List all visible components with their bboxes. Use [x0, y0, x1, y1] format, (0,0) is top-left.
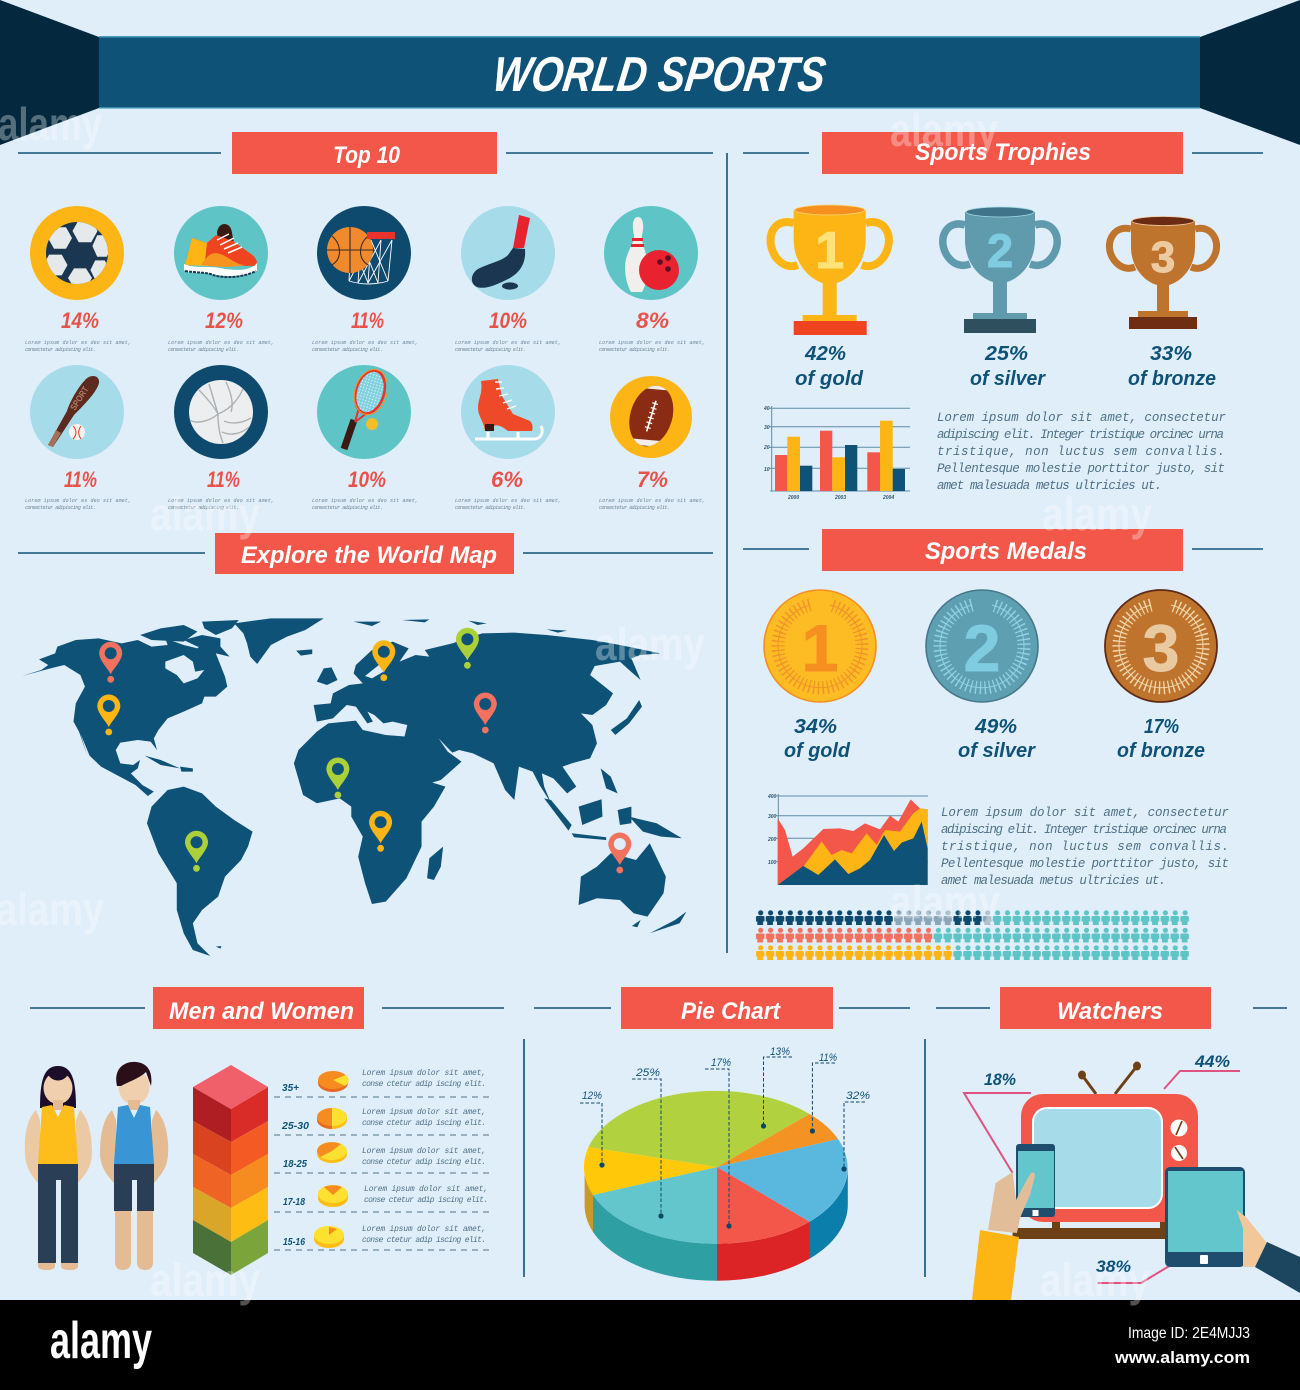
watermarks: alamy — [150, 488, 260, 540]
row text: Lorem ipsum dolor sit amet, — [362, 1147, 486, 1156]
medal label: of gold: of gold — [784, 740, 851, 762]
trophy label: bronze: 33% — [1150, 343, 1192, 365]
footer url: www.alamy.com — [1114, 1348, 1250, 1367]
area chart — [767, 794, 928, 885]
icon: tennis racket and ball — [317, 365, 411, 459]
captions: bottom row: Lorem ipsum dolor es deo sit amet, — [25, 498, 131, 504]
callout: 44% — [1164, 1052, 1240, 1089]
captions: bottom row: Lorem ipsum dolor es deo sit amet, — [168, 498, 274, 504]
mini pie: 15-16 — [314, 1226, 344, 1248]
callout: 11% — [810, 1052, 837, 1134]
bar chart: 20 — [763, 445, 770, 451]
watermarks: alamy — [0, 98, 102, 150]
footer image id: Image ID: 2E4MJJ3 — [1128, 1325, 1250, 1342]
row text: Lorem ipsum dolor sit amet, — [364, 1185, 488, 1194]
map pin: Australia — [608, 832, 631, 873]
heading: Pie Chart — [621, 987, 833, 1029]
callout: 32%: 32% — [846, 1090, 870, 1102]
map pin: Scandinavia — [372, 640, 395, 681]
captions: top row: Lorem ipsum dolor es deo sit amet, — [25, 340, 131, 346]
age labels: 17-18 — [283, 1197, 305, 1208]
heading: Top 10: Top 10 — [333, 142, 401, 169]
area chart: 300 — [768, 814, 777, 820]
icon: ice skate — [461, 365, 555, 459]
bar chart: 30 — [764, 425, 770, 431]
pie slices — [584, 1091, 848, 1244]
row text: Lorem ipsum dolor sit amet, — [362, 1225, 486, 1234]
icon: baseball bat and ball: SPORT — [68, 384, 91, 412]
people row 2 — [756, 928, 1190, 944]
heading: Sports Medals — [822, 529, 1183, 571]
map pin: Canada — [99, 642, 122, 683]
map pin: South America — [185, 831, 208, 872]
percentages: bottom row: 7% — [637, 467, 668, 492]
callout: 12%: 12% — [582, 1090, 602, 1102]
icon: baseball bat and ball — [30, 365, 124, 459]
trophy label: of silver: of silver — [970, 368, 1046, 390]
captions: top row: Lorem ipsum dolor es deo sit amet, — [168, 340, 274, 346]
captions: top row: Lorem ipsum dolor es deo sit amet, — [312, 340, 418, 346]
icon: basketball and hoop — [317, 206, 411, 300]
callout: 38%: 38% — [1096, 1257, 1131, 1276]
panel: world map — [22, 618, 687, 956]
title: WORLD SPORTS — [489, 47, 829, 102]
icon: gold medal: 1 — [802, 611, 838, 685]
percentages: top row: 14% — [61, 308, 99, 333]
captions: top row: Lorem ipsum dolor es deo sit amet, — [599, 340, 705, 346]
trophy label: gold: 42% — [804, 343, 846, 365]
heading: Sports Trophies — [822, 132, 1183, 174]
text block: trophies: adipiscing elit. Integer tristique orcinec urna — [937, 428, 1224, 442]
watermarks: alamy — [890, 104, 998, 156]
captions: bottom row — [25, 498, 705, 511]
icon: hockey stick and puck — [461, 206, 555, 300]
age rows — [274, 1069, 493, 1250]
percentages: bottom row: 10% — [348, 467, 386, 492]
callout: 25% — [632, 1067, 664, 1219]
icon: silver trophy: 2 — [987, 224, 1013, 277]
text block: medals: adipiscing elit. Integer tristique orcinec urna — [941, 823, 1227, 837]
row text: conse ctetur adip iscing elit. — [362, 1119, 486, 1128]
area chart: 100 — [768, 860, 777, 866]
callout: 44%: 44% — [1194, 1052, 1230, 1071]
panel: men and women — [25, 1062, 493, 1275]
pie sides — [585, 1167, 848, 1281]
bar chart: 2004 — [882, 495, 894, 501]
footer logo: alamy — [50, 1312, 152, 1370]
text block: medals: Pellentesque molestie porttitor justo, sit — [941, 857, 1229, 871]
icon: gold trophy — [771, 205, 889, 335]
row text — [362, 1069, 488, 1245]
watermarks: alamy — [595, 618, 705, 670]
callout: 12% — [580, 1090, 605, 1168]
percentages: top row: 10% — [489, 308, 527, 333]
heading: Sports Trophies: Sports Trophies — [915, 139, 1091, 166]
row text: conse ctetur adip iscing elit. — [364, 1196, 488, 1205]
percentages: bottom row: 11% — [207, 467, 240, 492]
bar chart — [763, 406, 910, 501]
row text: conse ctetur adip iscing elit. — [362, 1236, 486, 1245]
heading: Pie Chart: Pie Chart — [681, 998, 781, 1025]
area chart: 200 — [767, 837, 777, 843]
heading: Watchers: Watchers — [1057, 998, 1163, 1025]
captions: bottom row: consectetur adipiscing elit. — [312, 505, 383, 511]
icon: american football — [610, 370, 692, 458]
map pin: USA — [97, 694, 120, 735]
watermarks: alamy — [1040, 1254, 1150, 1306]
panel: sports trophies — [763, 205, 1226, 501]
watermarks: alamy — [1042, 488, 1152, 540]
callout: 11%: 11% — [819, 1052, 837, 1064]
trophy label: of bronze: of bronze — [1128, 368, 1216, 390]
icon: smartphone in hand — [972, 1144, 1055, 1300]
medal label: of bronze: of bronze — [1117, 740, 1205, 762]
captions: bottom row: Lorem ipsum dolor es deo sit amet, — [455, 498, 561, 504]
text block: medals: tristique, non luctus sem convallis. — [941, 840, 1229, 854]
icon: bowling pin and ball — [604, 206, 698, 300]
callout: 13%: 13% — [770, 1046, 790, 1058]
captions: bottom row: consectetur adipiscing elit. — [168, 505, 239, 511]
captions: top row: consectetur adipiscing elit. — [455, 347, 526, 353]
panel: top 10 sports — [25, 206, 705, 511]
heading: Men and Women — [153, 987, 364, 1029]
captions: bottom row: consectetur adipiscing elit. — [599, 505, 670, 511]
icon: tablet in hand — [1165, 1167, 1300, 1293]
map pin: Central Africa — [369, 811, 392, 852]
icon: silver medal: 2 — [964, 611, 1000, 685]
percentages: bottom row: 11% — [64, 467, 97, 492]
bar chart: 10 — [764, 467, 770, 473]
panel: sports medals — [756, 590, 1229, 961]
panel: watchers — [964, 1052, 1300, 1300]
captions: top row: consectetur adipiscing elit. — [599, 347, 670, 353]
medal label: 34%: 34% — [794, 716, 837, 738]
map pin: West Africa — [326, 758, 349, 798]
captions: top row: consectetur adipiscing elit. — [312, 347, 383, 353]
people row 3 — [756, 945, 1190, 961]
icon: man — [100, 1062, 168, 1270]
medal label: 49%: 49% — [974, 716, 1017, 738]
row text: conse ctetur adip iscing elit. — [362, 1080, 486, 1089]
age labels: 15-16 — [283, 1237, 305, 1248]
heading: Sports Medals: Sports Medals — [925, 538, 1087, 565]
area chart: 400 — [767, 794, 777, 800]
percentages: bottom row — [64, 467, 668, 492]
icon: silver trophy — [943, 207, 1057, 333]
captions: bottom row: Lorem ipsum dolor es deo sit amet, — [312, 498, 418, 504]
icon: gold trophy: 1 — [815, 222, 844, 280]
icon: volleyball — [174, 365, 268, 459]
bar chart: 2003 — [834, 495, 846, 501]
heading: Men and Women: Men and Women — [169, 998, 354, 1025]
icon: bronze trophy: 3 — [1151, 233, 1175, 282]
row text: Lorem ipsum dolor sit amet, — [362, 1108, 486, 1117]
trophy label: of gold: of gold — [795, 368, 864, 390]
callout: 32% — [841, 1090, 870, 1172]
mini pie: 35+ — [318, 1071, 349, 1092]
footer bar — [0, 1300, 1300, 1390]
isometric bar stack — [193, 1065, 268, 1275]
callout: 38% — [1096, 1257, 1173, 1283]
callout: 25%: 25% — [635, 1067, 660, 1079]
mini pie: 17-18 — [318, 1185, 348, 1207]
captions: bottom row: consectetur adipiscing elit. — [25, 505, 96, 511]
icon: television — [1013, 1062, 1198, 1239]
text block: trophies: tristique, non luctus sem convallis. — [937, 445, 1225, 459]
world map continents — [22, 618, 687, 956]
icon: woman — [25, 1066, 92, 1270]
icon: gold medal — [764, 590, 876, 702]
map pin: Russia — [456, 628, 479, 669]
age labels: 25-30 — [281, 1121, 309, 1132]
icon: bronze medal — [1105, 590, 1217, 702]
title banner — [0, 0, 1300, 145]
heading: Top 10 — [232, 132, 497, 174]
text block: trophies: amet malesuada metus ultricies ut. — [937, 479, 1162, 493]
percentages: top row — [61, 308, 669, 333]
heading: Explore the World Map — [215, 533, 514, 574]
panel: pie chart — [580, 1046, 870, 1281]
icon: soccer ball — [30, 206, 124, 300]
row text: Lorem ipsum dolor sit amet, — [362, 1069, 486, 1078]
callout: 18% — [964, 1070, 1031, 1173]
captions: top row: Lorem ipsum dolor es deo sit amet, — [455, 340, 561, 346]
heading: Explore the World Map: Explore the World Map — [241, 542, 497, 569]
map pin: Central Asia — [474, 692, 497, 733]
captions: bottom row: Lorem ipsum dolor es deo sit amet, — [599, 498, 705, 504]
icon: silver medal — [926, 590, 1038, 702]
captions: top row: consectetur adipiscing elit. — [25, 347, 96, 353]
trophy label: silver: 25% — [984, 343, 1028, 365]
watermarks: alamy — [890, 876, 1000, 928]
percentages: bottom row: 6% — [491, 467, 523, 492]
captions: top row: consectetur adipiscing elit. — [168, 347, 239, 353]
text block: medals: amet malesuada metus ultricies ut. — [941, 874, 1166, 888]
text block: trophies: Pellentesque molestie porttitor justo, sit — [937, 462, 1225, 476]
percentages: top row: 11% — [351, 308, 384, 333]
heading: Watchers — [1000, 987, 1211, 1029]
row text: conse ctetur adip iscing elit. — [362, 1158, 486, 1167]
watermarks: alamy — [150, 1254, 260, 1306]
age labels: 35+ — [282, 1083, 299, 1094]
age labels — [281, 1083, 309, 1248]
bar chart: 2000 — [787, 495, 799, 501]
captions: bottom row: consectetur adipiscing elit. — [455, 505, 526, 511]
captions: top row — [25, 340, 705, 353]
callout: 17%: 17% — [711, 1057, 731, 1069]
people rows — [756, 910, 1190, 961]
inland seas — [165, 655, 383, 683]
medal label: 17%: 17% — [1144, 716, 1179, 738]
bar chart: 40 — [763, 406, 770, 412]
callout: 17% — [705, 1057, 732, 1229]
text block: medals — [941, 806, 1229, 888]
percentages: top row: 12% — [205, 308, 243, 333]
watermarks — [0, 98, 1152, 1306]
people row 1 — [756, 910, 1190, 926]
medal label: of silver: of silver — [958, 740, 1036, 762]
percentages: top row: 8% — [636, 308, 669, 333]
age labels: 18-25 — [283, 1159, 307, 1170]
callout: 13% — [761, 1046, 792, 1129]
text block: medals: Lorem ipsum dolor sit amet, consectetur — [941, 806, 1229, 820]
mini pie: 25-30 — [317, 1108, 347, 1129]
text block: trophies — [937, 411, 1226, 493]
section rules — [18, 153, 1287, 1277]
text block: trophies: Lorem ipsum dolor sit amet, consectetur — [937, 411, 1226, 425]
icon: bronze medal: 3 — [1143, 611, 1179, 685]
icon: running shoe — [174, 206, 268, 300]
callout: 18%: 18% — [984, 1070, 1016, 1089]
mini pie: 18-25 — [317, 1142, 347, 1163]
icon: bronze trophy — [1109, 216, 1217, 329]
